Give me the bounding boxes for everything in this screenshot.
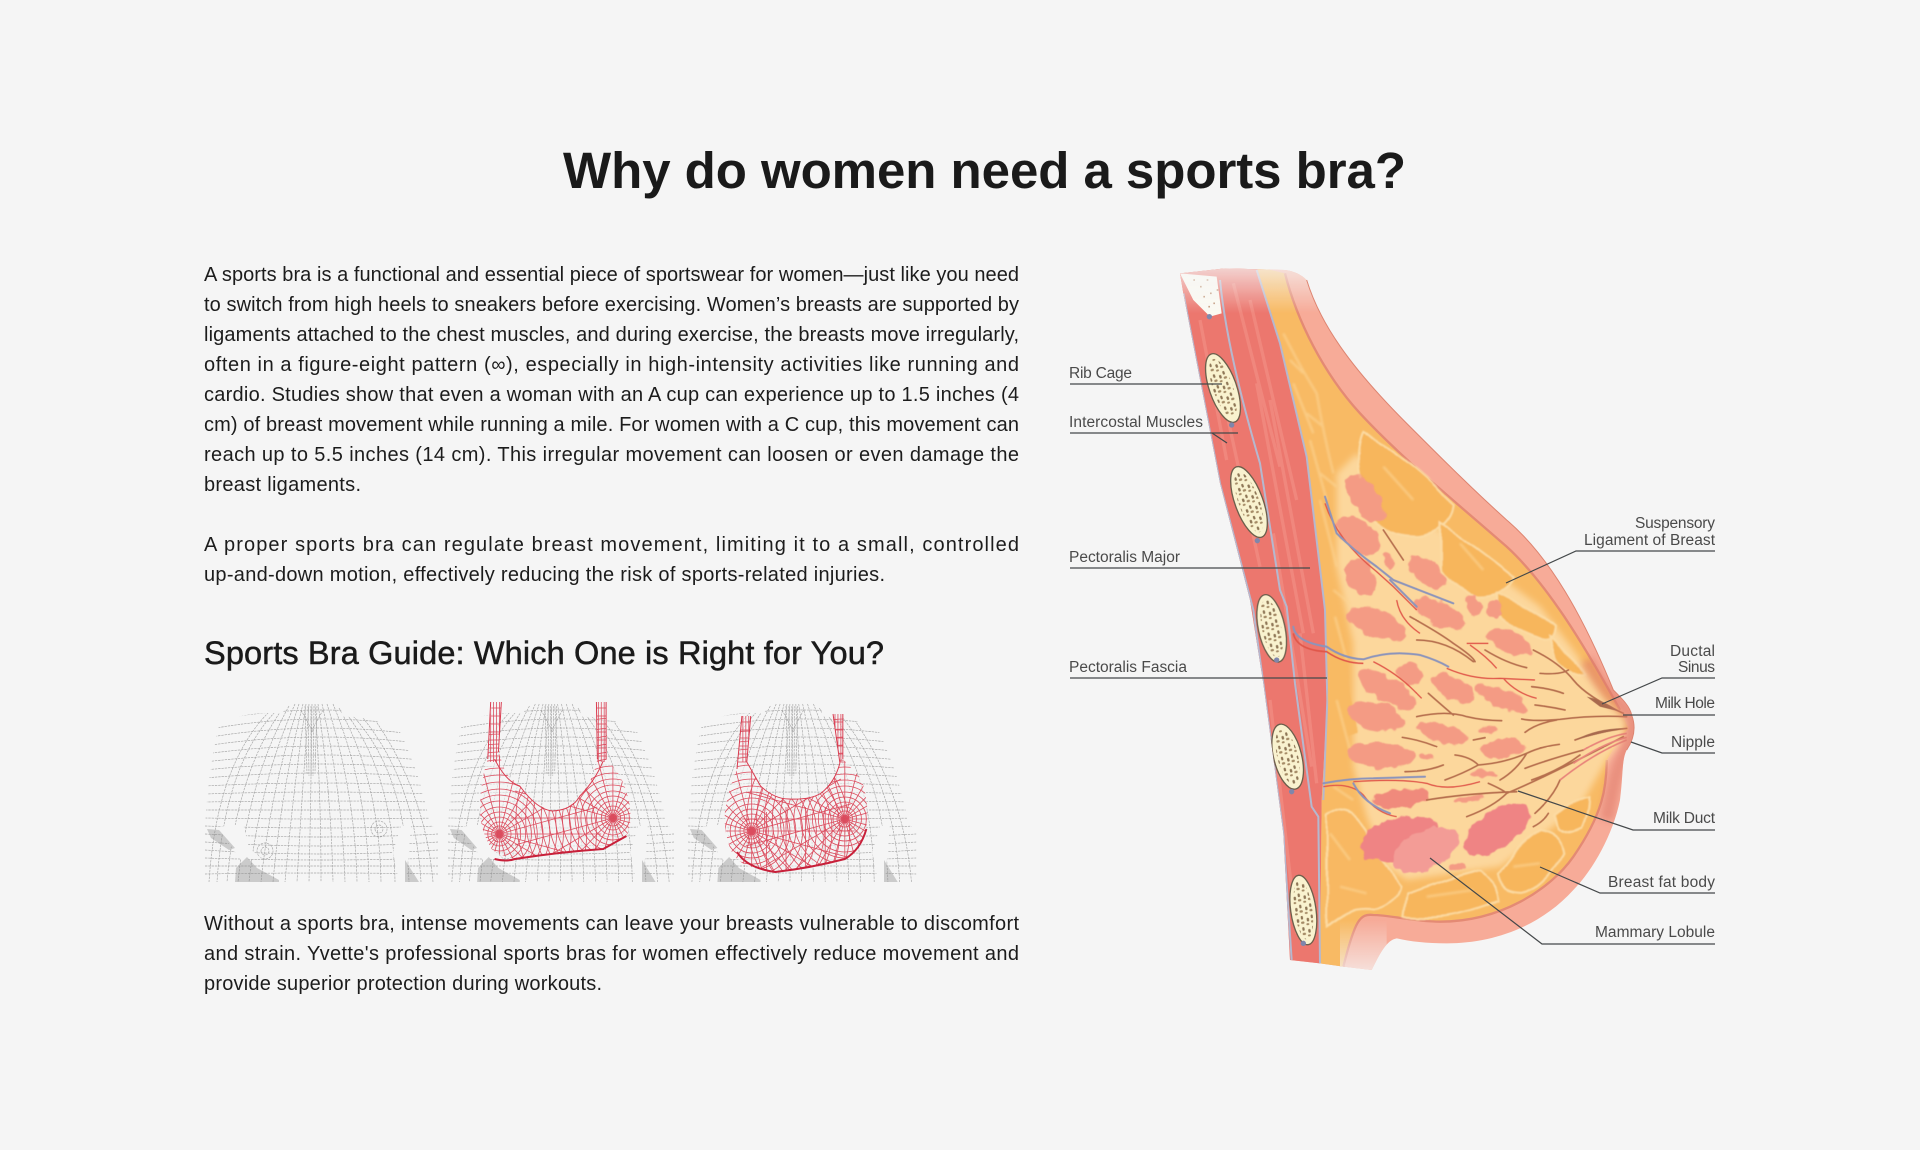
blue vessels	[1293, 497, 1453, 813]
label: Ductal Sinus: Ductal	[1670, 643, 1715, 660]
skin outline	[1307, 280, 1634, 750]
gland region	[1337, 453, 1628, 880]
label: Breast fat body: Breast fat body	[1608, 874, 1715, 891]
label: Suspensory Ligament of Breast: Ligament of Breast	[1584, 532, 1716, 549]
skin layer	[1173, 263, 1647, 977]
label: Nipple: Nipple	[1671, 734, 1715, 751]
chest muscles	[1173, 267, 1327, 967]
label: Milk Duct	[1518, 791, 1716, 830]
text block: why a sports bra matters: to switch from high heels to sneakers before exercising. Women’s breasts are supported by	[204, 294, 1019, 316]
text block: why a sports bra matters: cm) of breast movement while running a mile. For women with a C cup, this movement can	[204, 414, 1019, 436]
rib marrow	[1204, 356, 1316, 941]
fat layer	[1257, 267, 1628, 967]
gland lobes	[1329, 468, 1538, 882]
figure: torso wearing thin-strap bra	[448, 702, 674, 882]
label: Milk Hole	[1623, 695, 1715, 715]
text block: why a sports bra matters	[204, 264, 1019, 496]
muscle streaks	[1200, 283, 1317, 933]
title: Why do women need a sports bra?	[563, 142, 1406, 199]
rib bones	[1198, 350, 1321, 946]
text block: why a sports bra matters: A sports bra is a functional and essential piece of sportswear for women—just like you need	[204, 264, 1019, 286]
text block: why a sports bra matters: often in a figure-eight pattern (∞), especially in high-intensity activities like running and	[204, 354, 1019, 376]
text block: regulation	[204, 534, 1019, 586]
bottom fade	[1340, 924, 1387, 970]
skin inner line	[1285, 273, 1620, 967]
text block: closing: Without a sports bra, intense movements can leave your breasts vulnerable to discomfort	[204, 913, 1019, 935]
figure: torso without bra	[205, 704, 438, 882]
label: Mammary Lobule: Mammary Lobule	[1595, 924, 1715, 941]
figure: torso wearing full-coverage bra	[688, 704, 916, 882]
text block: regulation: A proper sports bra can regulate breast movement, limiting it to a small, controlled	[204, 534, 1019, 556]
anatomy illustration	[1173, 263, 1647, 977]
label: Milk Hole: Milk Hole	[1655, 695, 1715, 712]
text block: closing: and strain. Yvette's professional sports bras for women effectively reduce movement and	[204, 943, 1019, 965]
fat veins	[1283, 333, 1540, 897]
label: Rib Cage: Rib Cage	[1069, 365, 1132, 382]
text block: why a sports bra matters: ligaments attached to the chest muscles, and during exercise, the breasts move irregularly,	[204, 324, 1019, 346]
label: Suspensory Ligament of Breast	[1506, 515, 1716, 583]
sternum cap	[1180, 273, 1222, 317]
label: Suspensory Ligament of Breast: Suspensory	[1635, 515, 1715, 532]
top fade	[1173, 263, 1407, 313]
label: Ductal Sinus	[1602, 643, 1715, 704]
label: Intercostal Muscles	[1069, 414, 1238, 443]
label: Pectoralis Major: Pectoralis Major	[1069, 549, 1180, 566]
label: Nipple	[1631, 734, 1715, 753]
text block: why a sports bra matters: reach up to 5.5 inches (14 cm). This irregular movement can loosen or even damage the	[204, 444, 1019, 466]
muscle membranes	[1183, 270, 1327, 963]
vessel dots	[1207, 314, 1306, 946]
milk ducts	[1383, 530, 1627, 827]
text block: why a sports bra matters: breast ligaments.	[204, 474, 361, 496]
text block: closing	[204, 913, 1019, 995]
areola shading	[1587, 660, 1632, 820]
text block: closing: provide superior protection during workouts.	[204, 973, 602, 995]
label: Intercostal Muscles: Intercostal Muscles	[1069, 414, 1203, 431]
text block: why a sports bra matters: cardio. Studies show that even a woman with an A cup can experience up to 1.5 inches (4	[204, 384, 1019, 406]
sternum dots	[1193, 280, 1218, 307]
label: Mammary Lobule	[1430, 858, 1715, 944]
text block: regulation: up-and-down motion, effectively reducing the risk of sports-related injuries.	[204, 564, 885, 586]
label: Breast fat body	[1540, 867, 1715, 893]
label: Pectoralis Fascia: Pectoralis Fascia	[1069, 659, 1187, 676]
label: Milk Duct: Milk Duct	[1653, 810, 1716, 827]
label: Ductal Sinus: Sinus	[1678, 659, 1715, 676]
red vessels	[1323, 503, 1537, 817]
heading: sports bra guide: Sports Bra Guide: Which One is Right for You?	[204, 635, 884, 671]
fat lobules	[1327, 433, 1590, 927]
